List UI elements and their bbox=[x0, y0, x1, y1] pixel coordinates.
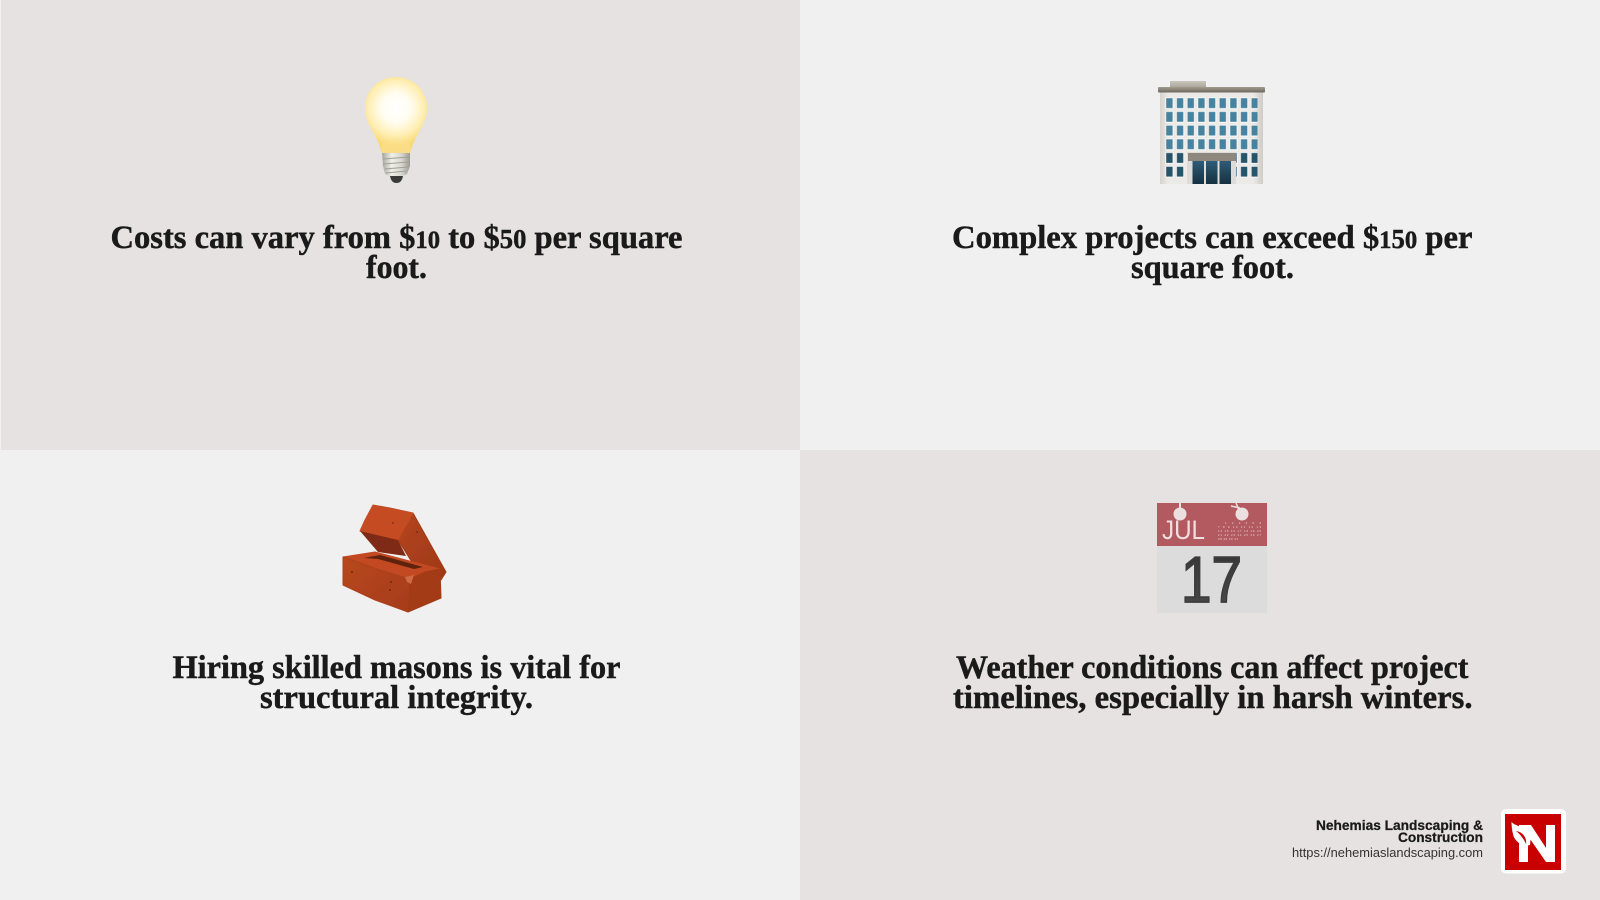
icon: brick bbox=[343, 505, 446, 612]
heading: complex projects: Complex projects can exceed $150 per bbox=[952, 220, 1472, 256]
icon: office building bbox=[1158, 81, 1265, 184]
heading: skilled masons: structural integrity. bbox=[260, 680, 533, 716]
panel: complex projects bbox=[800, 0, 1600, 450]
company name bbox=[1316, 818, 1483, 845]
icon: calendar: 7 8 9 10 11 12 13 bbox=[1218, 525, 1261, 529]
heading: cost range: foot. bbox=[366, 250, 427, 286]
heading: skilled masons bbox=[172, 650, 620, 716]
icon: calendar: JUL bbox=[1162, 515, 1205, 545]
heading: cost range bbox=[110, 220, 682, 286]
heading: weather: Weather conditions can affect project bbox=[956, 650, 1469, 686]
company name: Nehemias Landscaping & bbox=[1316, 818, 1483, 833]
panel: weather bbox=[800, 450, 1600, 900]
icon: calendar: 14 15 16 17 18 19 20 bbox=[1218, 529, 1261, 533]
footer: company brand bbox=[1292, 809, 1566, 874]
icon: light bulb bbox=[365, 77, 427, 183]
panel: skilled masons bbox=[0, 450, 800, 900]
heading: complex projects: square foot. bbox=[1131, 250, 1294, 286]
icon: calendar: 28 29 30 31 bbox=[1218, 537, 1238, 541]
heading: weather bbox=[953, 650, 1472, 716]
panel: cost range bbox=[1, 0, 800, 450]
icon: calendar: 1 2 3 4 5 6 bbox=[1225, 521, 1261, 525]
heading: complex projects bbox=[952, 220, 1472, 286]
logo bbox=[1501, 809, 1566, 874]
company name: Construction bbox=[1398, 830, 1483, 845]
heading: cost range: Costs can vary from $10 to $50 per square bbox=[110, 220, 682, 256]
heading: weather: timelines, especially in harsh winters. bbox=[953, 680, 1472, 716]
heading: skilled masons: Hiring skilled masons is vital for bbox=[172, 650, 620, 686]
icon: calendar: 17 bbox=[1181, 543, 1242, 616]
company url: https://nehemiaslandscaping.com bbox=[1292, 845, 1483, 860]
icon: calendar: 21 22 23 24 25 26 27 bbox=[1218, 533, 1261, 537]
icon: calendar bbox=[1157, 503, 1267, 616]
